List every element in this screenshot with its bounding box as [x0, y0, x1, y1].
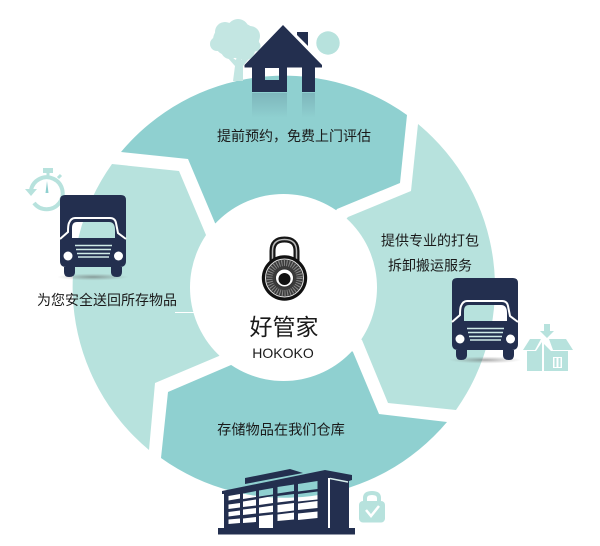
text: step 2 line 2: 拆卸搬运服务: [388, 258, 472, 274]
center white circle: [190, 194, 377, 381]
icon: stopwatch: [25, 168, 63, 209]
ring segment: left: [73, 164, 284, 450]
icon: house: [244, 25, 322, 118]
brand latin name: HOKOKO: [252, 345, 314, 361]
text: step 3: 存储物品在我们仓库: [217, 422, 345, 438]
text: step 1: 提前预约，免费上门评估: [217, 128, 371, 144]
icon: warehouse: [218, 469, 355, 534]
icon: box: [523, 324, 573, 371]
icon: tree: [210, 19, 260, 81]
icon: sun: [316, 31, 340, 55]
ring segment: top: [121, 76, 407, 287]
ring segment: bottom: [161, 287, 447, 498]
ring segment: right: [284, 124, 495, 410]
icon: lock check: [359, 493, 385, 522]
brand name: 好管家: [250, 314, 318, 340]
icon: truck left: [57, 195, 129, 280]
text: step 2 line 1: 提供专业的打包: [381, 232, 479, 248]
leader line: [175, 312, 194, 314]
icon: padlock: [262, 240, 307, 301]
icon: truck right: [449, 278, 521, 364]
text: step 4: 为您安全送回所存物品: [37, 292, 177, 308]
